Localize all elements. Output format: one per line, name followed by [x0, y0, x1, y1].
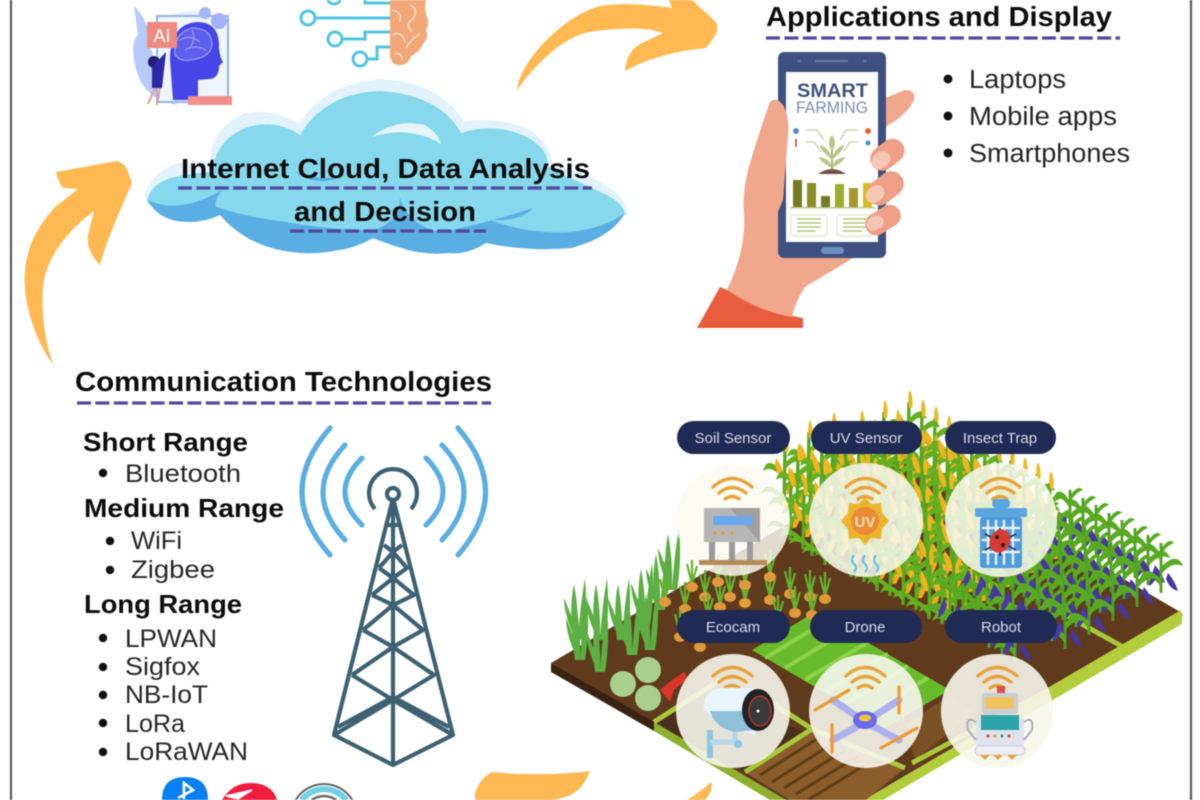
back of hand — [727, 90, 914, 317]
icon: bluetooth logo — [162, 777, 208, 800]
info cards — [791, 215, 873, 236]
sensor: UV sensor — [809, 421, 923, 577]
sensor: ecocam — [676, 610, 790, 768]
sensor: insect trap — [945, 421, 1057, 577]
sensor: soil sensor: Soil Sensor — [695, 430, 771, 447]
arrow: cloud to applications — [517, 0, 718, 90]
heading: communication technologies: Communication Technologies — [75, 366, 492, 397]
list: communication ranges: Short Range — [83, 427, 248, 457]
field base — [551, 453, 1182, 800]
list: communication ranges: LoRa — [125, 710, 185, 738]
sensor: UV sensor: UV Sensor — [830, 430, 902, 447]
sensor: UV sensor: UV — [855, 514, 875, 531]
bar chart — [790, 180, 875, 208]
heading: applications and display: Applications and Display — [766, 1, 1113, 32]
phone body — [778, 52, 886, 258]
list: communication ranges: LoRaWAN — [125, 738, 248, 766]
icon: signal tower — [302, 428, 486, 765]
icon: red wireless logo — [222, 783, 277, 800]
cloud with heading — [145, 79, 627, 254]
list: communication ranges: Long Range — [84, 589, 242, 619]
thumb — [760, 100, 788, 212]
icon: concentric signal logo — [296, 784, 352, 800]
list: communication ranges: LPWAN — [125, 625, 217, 653]
sensor: drone — [809, 610, 923, 768]
eggplant crops — [929, 488, 1183, 663]
phone screen — [786, 72, 878, 242]
sensor: robot — [941, 610, 1057, 768]
list: display devices — [944, 66, 1130, 168]
heading: cloud: Internet Cloud, Data Analysis — [181, 153, 590, 184]
sleeve — [697, 287, 803, 328]
green crop strips — [752, 612, 950, 728]
list: display devices: Mobile apps — [969, 103, 1117, 131]
list: communication ranges: Bluetooth — [125, 460, 241, 488]
dark soil near plot — [654, 690, 812, 772]
cloud with heading: and Decision — [294, 196, 476, 227]
list: communication ranges: Sigfox — [125, 653, 201, 681]
list: communication ranges: WiFi — [131, 527, 182, 555]
fingers — [861, 134, 909, 239]
icon: hand holding smartphone: SMART — [797, 81, 868, 102]
sensor: soil sensor — [676, 421, 790, 576]
list: communication ranges: Zigbee — [131, 556, 215, 584]
illustration: isometric farm field — [551, 390, 1183, 800]
sensor: drone: Drone — [845, 619, 885, 636]
list: communication ranges: Medium Range — [84, 493, 284, 523]
sensor: insect trap: Insect Trap — [963, 430, 1037, 447]
icon: hand holding smartphone: FARMING — [796, 99, 868, 117]
list: communication ranges — [83, 427, 284, 766]
vegetable crops — [564, 528, 831, 711]
cloud shape — [145, 79, 627, 254]
plot dividers — [654, 612, 1125, 772]
arrow: communication to cloud — [25, 161, 132, 363]
icon: hand holding smartphone — [697, 52, 914, 328]
plant diagram — [793, 128, 871, 174]
list: display devices: Laptops — [969, 66, 1066, 94]
list: display devices: Smartphones — [969, 140, 1130, 168]
sensor: ecocam: Ecocam — [706, 619, 760, 636]
sensor: robot: Robot — [981, 619, 1022, 636]
furrow plot — [745, 730, 905, 800]
corn crops — [761, 390, 1075, 633]
arrow: field to communication — [475, 771, 712, 800]
icon: brain circuit — [301, 0, 428, 66]
icon: AI head illustration — [133, 6, 232, 105]
list: communication ranges: NB-IoT — [125, 681, 208, 709]
icon: AI head illustration: AI — [153, 26, 171, 46]
